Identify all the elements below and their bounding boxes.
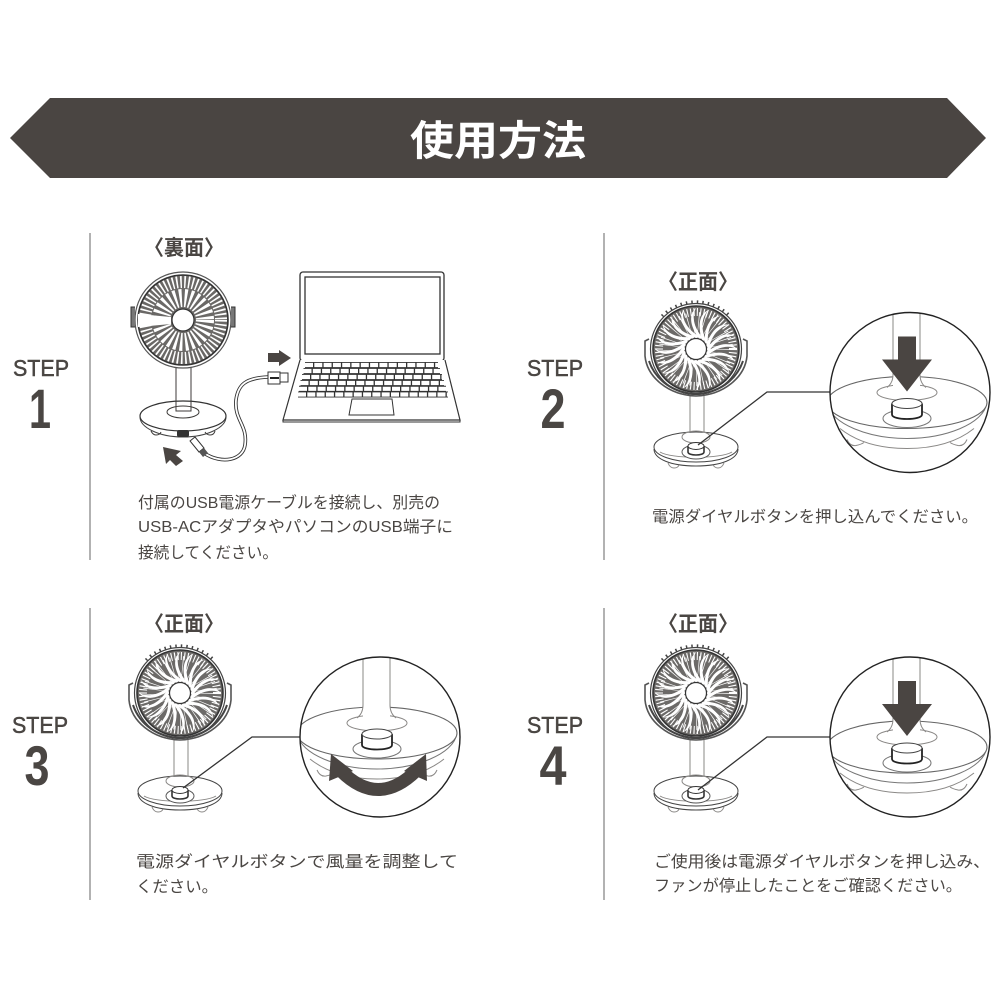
panel: step 3 [12, 608, 460, 900]
step 2 label [527, 355, 583, 440]
step 4 text: ファンが停止したことをご確認ください。 [654, 877, 962, 895]
step 1 label [13, 355, 69, 440]
icon: laptop [283, 272, 460, 422]
step 4 label: 4 [540, 734, 566, 797]
step 1 label: STEP [13, 355, 69, 381]
step 3 label [12, 712, 68, 797]
icon: front view fan [645, 302, 747, 468]
arrow: press down [882, 336, 932, 392]
leader line [698, 392, 832, 445]
leader line [698, 737, 832, 790]
leader line [183, 737, 302, 788]
step 3 text [136, 853, 458, 896]
step 3 text: 電源ダイヤルボタンで風量を調整して [136, 853, 458, 871]
step 4 label [527, 712, 583, 797]
step 2 label: 2 [540, 377, 566, 440]
icon: rear view fan [131, 272, 235, 437]
title banner [10, 98, 986, 178]
step 1 text [138, 493, 453, 562]
zoom detail: dial press [827, 647, 990, 817]
panel: step 4 [527, 608, 990, 900]
step 2 text: 電源ダイヤルボタンを押し込んでください。 [652, 508, 978, 526]
zoom detail: dial press [827, 302, 990, 472]
step 2 label: STEP [527, 355, 583, 381]
arrow: press down [882, 681, 932, 736]
arrow: rotate both ways [329, 754, 427, 790]
step 1 text: 付属のUSB電源ケーブルを接続し、別売の [138, 493, 440, 512]
step 3 label: 3 [24, 734, 50, 797]
title: 使用方法 [410, 118, 586, 164]
step 4 text [654, 853, 990, 895]
front view label: 〈正面〉 [658, 271, 738, 294]
rear view label: 〈裏面〉 [144, 237, 224, 260]
step 4 text: ご使用後は電源ダイヤルボタンを押し込み、 [654, 853, 990, 871]
front view label: 〈正面〉 [658, 613, 738, 636]
step 3 label: STEP [12, 712, 68, 738]
panel: step 2 [527, 233, 990, 560]
icon: USB cable [190, 372, 288, 460]
step 3 text: ください。 [136, 878, 218, 896]
arrow: toward base port [163, 447, 183, 466]
zoom detail: dial turn [299, 656, 461, 818]
panel: step 1 [13, 233, 460, 562]
step 1 text: USB-ACアダプタやパソコンのUSB端子に [138, 518, 453, 536]
step 4 label: STEP [527, 712, 583, 738]
step 1 text: 接続してください。 [138, 544, 278, 562]
front view label: 〈正面〉 [144, 613, 224, 636]
arrow: toward laptop [268, 350, 291, 366]
icon: front view fan [645, 646, 747, 812]
icon: front view fan [129, 646, 231, 812]
step 1 label: 1 [29, 377, 51, 440]
